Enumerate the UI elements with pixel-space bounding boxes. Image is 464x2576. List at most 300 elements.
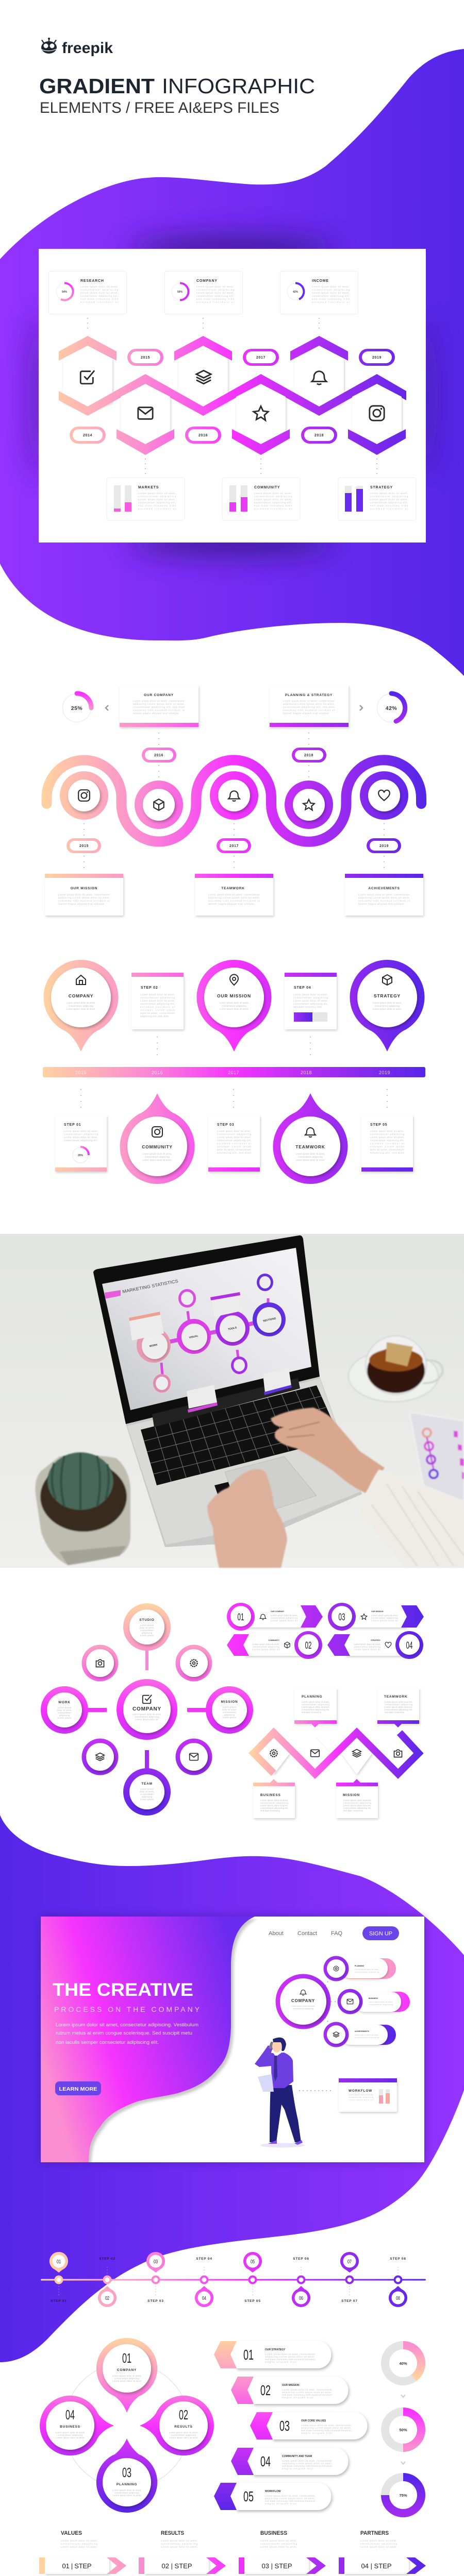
- step 02 results: [139, 2530, 226, 2574]
- info card: markets: Lorem ipsum dolor sit amet,: [138, 492, 176, 495]
- circle: mission: Lorem ipsum: [223, 1706, 236, 1708]
- info card: company: Lorem ipsum dolor sit amet,: [196, 292, 234, 294]
- info card: strategy: Lorem ipsum dolor sit amet,: [370, 492, 408, 495]
- node: 2017 bell: [210, 771, 258, 820]
- circle: company: COMPANY: [132, 1706, 161, 1712]
- pin 01 company: [96, 2338, 157, 2413]
- card: step 05: consectetuer adipiscing elit,: [370, 1139, 404, 1142]
- hexagon icons: [80, 370, 384, 420]
- timeline line: [41, 2279, 426, 2280]
- card: our company: [120, 685, 198, 727]
- card: achievements: adipiscing Lorem ipsum dolor sit amet,: [358, 896, 410, 899]
- hero body text: rutrum metus at enim congue scelerisque. Sed suscipit metu: [56, 2030, 192, 2036]
- screen labels: TOOLS: [228, 1326, 237, 1331]
- donut: 25%: 25%: [71, 705, 82, 711]
- card: step 05: Lorem ipsum dolor sit amet,: [370, 1130, 404, 1132]
- card: teamwork: Lorem ipsum dolor sit amet,: [385, 1701, 412, 1703]
- pin 04 business: Lorem ipsum dolor sit amet,: [56, 2431, 85, 2434]
- screen labels: WORK: [149, 1343, 158, 1348]
- zigzag ribbon: [59, 374, 406, 416]
- circle: team: TEAM: [141, 1782, 153, 1786]
- card: teamwork: adipiscing Lorem ipsum dolor sit amet,: [208, 896, 260, 899]
- info card: community: consectetuer adipiscing elit,: [254, 501, 292, 504]
- circle: work: Lorem ipsum: [58, 1706, 71, 1709]
- card: teamwork: [377, 1688, 419, 1727]
- card: achievements: laoreet magna aliquam erat volutpat.: [358, 903, 405, 905]
- step card 04: Lorem ipsum dolor sit: [354, 1648, 381, 1651]
- circle: work: dolor sit amet,: [57, 1709, 72, 1711]
- info card: income: consectetuer adipiscing: [312, 289, 350, 291]
- step pins upper: 01: [57, 2259, 61, 2265]
- item 02 our mission: 02: [260, 2382, 271, 2398]
- pin: strategy: consectetuer adipiscing: [375, 1005, 400, 1007]
- node: 2018 star: [285, 781, 333, 829]
- card: planning and strategy: adipiscing Lorem ipsum dolor sit amet,: [283, 703, 335, 705]
- logo wordmark: freepik: [62, 40, 113, 57]
- circle: studio: Lorem ipsum: [140, 1634, 154, 1637]
- info card: community: sed diam nonummy nibh: [254, 504, 292, 507]
- card: step 01: STEP 01: [64, 1123, 81, 1127]
- panel: purple wave background 2: [0, 1815, 464, 2362]
- info card: income: [280, 271, 358, 314]
- item 04 community and team: COMMUNITY AND TEAM: [282, 2455, 312, 2458]
- card: mission: [336, 1779, 378, 1818]
- step card 01: OUR COMPANY: [271, 1611, 285, 1613]
- timeline bar: 2017: [228, 1070, 239, 1075]
- pin 02 results: Lorem ipsum dolor sit amet: [169, 2436, 198, 2439]
- card: planning: [294, 1688, 337, 1727]
- step pins lower: 02: [105, 2296, 109, 2301]
- step 02 results: 02 | STEP: [162, 2562, 192, 2570]
- pin: community: Lorem ipsum dolor sit amet.: [143, 1159, 172, 1161]
- info card: company: 50%: [177, 291, 183, 294]
- step 02 results: consectetuer adipiscing: [161, 2543, 197, 2545]
- card: business: Lorem ipsum dolor sit amet,: [260, 1804, 288, 1807]
- step labels: STEP 03: [147, 2299, 164, 2303]
- item 03 our core values: adipiscing Lorem ipsum dolor sit amet,: [301, 2427, 351, 2429]
- pin 01 company: COMPANY: [117, 2368, 137, 2372]
- step card 04: consectetuer adipiscing: [354, 1646, 380, 1648]
- step card 04: Lorem ipsum dolor sit amet,: [354, 1643, 380, 1646]
- card: step 03: adipiscing elit, sed diam: [217, 1151, 251, 1154]
- step labels: STEP 06: [293, 2257, 309, 2261]
- card: step 02: consectetuer adipiscing: [140, 996, 175, 999]
- card: teamwork: sed diam nonummy: [385, 1711, 405, 1714]
- circle: mission: dolor sit amet,: [222, 1708, 237, 1711]
- card: step 03: dolor sit amet, consectetuer: [217, 1148, 251, 1151]
- card: planning: sed diam nonummy: [302, 1711, 322, 1714]
- timeline bar: 2016: [152, 1070, 163, 1075]
- step 01 values: Lorem ipsum dolor sit amet,: [61, 2539, 97, 2542]
- pin 01 company: Lorem ipsum dolor sit amet: [112, 2380, 141, 2382]
- pin: our mission: Lorem ipsum dolor sit amet,: [220, 1008, 248, 1010]
- pin: company: COMPANY: [69, 993, 93, 998]
- step card 02: COMMUNITY: [268, 1639, 280, 1641]
- card: step 03: [208, 1115, 260, 1172]
- circle: studio: consectetuer: [140, 1629, 154, 1632]
- step card 02: consectetuer adipiscing: [253, 1646, 279, 1648]
- card: teamwork: Lorem ipsum dolor sit amet,: [385, 1706, 412, 1708]
- circle: mission: adipiscing: [224, 1714, 235, 1716]
- step 04 partners: 04 | STEP: [361, 2562, 392, 2570]
- card: achievements: Lorem ipsum dolor sit amet, consectetuer: [358, 893, 410, 896]
- item 04 community and team: Lorem ipsum dolor sit amet, consectetuer: [282, 2460, 332, 2462]
- info card: strategy: consectetuer adipiscing elit,: [370, 501, 408, 504]
- step pins lower: [98, 2286, 407, 2307]
- hero body text: Lorem ipsum dolor sit amet, consectetur adipiscing. Vestibulum: [56, 2022, 198, 2028]
- info card: income: sed diam nonummy nibh: [312, 298, 350, 300]
- item 02 our mission: Lorem ipsum dolor sit amet, consectetuer: [282, 2388, 332, 2391]
- item 04 community and team: [231, 2448, 349, 2475]
- card: step 05: Lorem ipsum dolor sit amet,: [370, 1136, 404, 1139]
- step pins lower: 06: [299, 2296, 303, 2301]
- step 01 values: 01 | STEP: [62, 2562, 92, 2570]
- info card: research: consectetuer adipiscing elit,: [80, 295, 118, 297]
- pin: teamwork: Lorem ipsum dolor sit amet.: [296, 1159, 325, 1161]
- card: planning: Lorem ipsum dolor sit amet,: [302, 1706, 329, 1708]
- pin 04 business: consectetuer adipiscing: [58, 2434, 82, 2436]
- diamond zigzag diagram: [253, 1688, 419, 1818]
- info card: research: 54%: [62, 291, 68, 294]
- pill: planning: [324, 1956, 396, 1981]
- item 05 workflow: [214, 2483, 331, 2510]
- card: teamwork: Lorem ipsum dolor sit amet, consectetuer: [208, 893, 260, 896]
- pill: achievements: [324, 2022, 396, 2047]
- item 01 our strategy: magna aliquam erat: [265, 2361, 296, 2363]
- radial company diagram: [41, 1603, 253, 1816]
- item 01 our strategy: [214, 2341, 331, 2368]
- pin: company: consectetuer adipiscing: [69, 1005, 93, 1007]
- card: teamwork: TEAMWORK: [384, 1695, 407, 1699]
- card: business: consectetuer adipiscing elit,: [260, 1807, 288, 1809]
- donut 40%: [385, 2345, 421, 2381]
- hero subheading: PROCESS ON THE COMPANY: [54, 2005, 200, 2013]
- year pills: 2018: [314, 434, 324, 437]
- step 01 values: Lorem ipsum dolor sit amet.: [61, 2546, 97, 2548]
- white hexagons top row: [63, 346, 344, 412]
- pill: planning: Lorem ipsum dolor sit amet,: [355, 1969, 379, 1971]
- step 03 business: 03 | STEP: [262, 2562, 292, 2570]
- card: our mission: nonummy nibh euismod tincidunt ut: [58, 900, 110, 902]
- circle: gear: [175, 1645, 212, 1682]
- card: achievements: ACHIEVEMENTS: [368, 887, 400, 890]
- circle: studio: Lorem ipsum: [140, 1624, 154, 1626]
- item 02 our mission: [231, 2377, 349, 2404]
- step card 03: 03: [338, 1612, 345, 1623]
- screen: [102, 1248, 311, 1413]
- pin 04 business: [40, 2396, 114, 2455]
- icon: freepik mascot: [41, 38, 57, 54]
- node: 2015 instagram: [60, 771, 108, 820]
- item 03 our core values: sed diam nonummy nibh euismod tincidunt: [301, 2429, 352, 2432]
- illustration: businessman on the phone: [255, 2038, 305, 2147]
- card: step 04: [285, 973, 337, 1029]
- pin 03 planning: Lorem ipsum dolor sit amet: [112, 2494, 141, 2497]
- card: step 05: dolor sit amet, consectetuer: [370, 1148, 404, 1151]
- step 03 business: BUSINESS: [260, 2530, 287, 2536]
- info card: community: COMMUNITY: [254, 486, 280, 489]
- step 02 results: Lorem ipsum dolor sit amet,: [161, 2539, 197, 2542]
- step card 01: consectetuer adipiscing: [271, 1617, 297, 1619]
- card: step 02: adipiscing elit, sed diam: [140, 1015, 169, 1018]
- pill: business: Lorem ipsum dolor sit amet,: [369, 2001, 393, 2003]
- pin 01 company: 01: [122, 2350, 131, 2366]
- circle: company: [117, 1679, 177, 1740]
- year pills: [70, 349, 395, 444]
- info card: markets: consectetuer adipiscing: [138, 495, 176, 498]
- step card 02: Lorem ipsum dolor sit: [253, 1648, 280, 1651]
- circle: company: consectetuer adipiscing: [135, 1716, 159, 1718]
- pin timeline section: [43, 960, 425, 1184]
- button: sign up: [362, 1926, 399, 1940]
- numbered arrow cards: [227, 1603, 424, 1659]
- item 01 our strategy: 01: [243, 2347, 254, 2363]
- laptop hinge: [152, 1378, 300, 1427]
- card: step 03: volutpat. Lorem ipsum: [217, 1145, 251, 1148]
- donut: 42%: [377, 693, 405, 722]
- card: achievements: [345, 874, 423, 916]
- info card: income: INCOME: [312, 279, 329, 283]
- info card: markets: euismod tincidunt ut: [138, 507, 176, 510]
- card: planning: consectetuer adipiscing: [302, 1703, 329, 1706]
- cactus pot: [35, 1455, 130, 1565]
- step labels: STEP 07: [341, 2299, 358, 2303]
- pin 04 business: 04: [65, 2407, 75, 2422]
- card: workflow: Lorem ipsum dolor sit: [349, 2099, 373, 2101]
- card: mission: sed diam nonummy: [343, 1809, 363, 1812]
- item 05 workflow: Lorem ipsum dolor sit amet, consectetuer: [265, 2495, 315, 2497]
- card: workflow: [339, 2078, 397, 2112]
- card: teamwork: nonummy nibh euismod tincidunt ut: [208, 900, 260, 902]
- step 02 results: RESULTS: [161, 2530, 184, 2536]
- step labels: [51, 2257, 406, 2303]
- card: planning and strategy: consectetuer adipiscing elit, sed diam: [283, 706, 335, 708]
- info card: strategy: [338, 478, 416, 520]
- card: step 04: Lorem ipsum dolor sit amet,: [293, 999, 328, 1002]
- step labels: STEP 05: [244, 2299, 261, 2303]
- card: teamwork: TEAMWORK: [221, 887, 245, 890]
- step timeline: [41, 2252, 426, 2307]
- card: step 03: Lorem ipsum dolor sit amet,: [217, 1130, 251, 1132]
- panel shadow glow: [32, 236, 432, 556]
- tea cup: [349, 1336, 442, 1402]
- hero shape shadow: [89, 1918, 256, 2162]
- step card 02: [227, 1631, 322, 1659]
- photo: laptop on a desk: [0, 1234, 464, 1568]
- info card: income: euismod tincidunt ut: [312, 301, 350, 303]
- info card: company: consectetuer adipiscing elit,: [196, 295, 234, 297]
- info card: strategy: sed diam nonummy nibh: [370, 504, 408, 507]
- circle: layers: [81, 1738, 119, 1775]
- card: our mission: laoreet magna aliquam erat volutpat.: [58, 903, 105, 905]
- step card 01: 01: [237, 1612, 244, 1623]
- item 01 our strategy: Lorem ipsum dolor sit amet, consectetuer: [265, 2353, 315, 2355]
- info card: community: consectetuer adipiscing: [254, 495, 292, 498]
- card: planning: Lorem ipsum dolor sit amet,: [302, 1701, 329, 1703]
- step labels: STEP 01: [51, 2299, 67, 2303]
- card: our company: OUR COMPANY: [144, 693, 174, 697]
- card: step 02: Lorem ipsum dolor sit amet,: [140, 993, 175, 996]
- card: our company: laoreet magna aliquam erat volutpat.: [133, 712, 179, 715]
- item 05 workflow: sed diam nonummy nibh euismod tincidunt: [265, 2500, 316, 2502]
- four pin cycle diagram: [40, 2338, 214, 2513]
- donut charts: [385, 2345, 421, 2513]
- circle: work: adipiscing: [59, 1714, 70, 1717]
- circle: team: Lorem ipsum: [140, 1788, 154, 1790]
- year pills: 2015: [141, 356, 150, 360]
- heading line 1: GRADIENT: [39, 74, 155, 98]
- navigation: Contact: [297, 1930, 317, 1937]
- circle: team: Lorem ipsum: [140, 1798, 154, 1801]
- card: step 01: Lorem ipsum dolor sit amet,: [64, 1136, 98, 1139]
- card: step 04: STEP 04: [294, 986, 311, 990]
- pin 01 company: Lorem ipsum dolor sit amet,: [112, 2375, 141, 2377]
- info card: company: euismod tincidunt ut: [196, 301, 235, 303]
- button: learn more: [55, 2081, 101, 2095]
- pill: planning: PLANNING: [355, 1965, 364, 1967]
- card: planning and strategy: laoreet magna aliquam erat volutpat.: [283, 712, 329, 715]
- circle: team: dolor sit amet,: [140, 1790, 154, 1793]
- pill: planning: consectetuer adipiscing: [355, 1971, 379, 1973]
- info card: income: Lorem ipsum dolor sit amet,: [312, 292, 350, 294]
- step pins upper: 07: [347, 2259, 352, 2265]
- landing page mockup: [41, 1917, 424, 2165]
- hero body text: [56, 2022, 198, 2045]
- info card: markets: sed diam nonummy nibh: [138, 504, 176, 507]
- step 01 values: consectetuer adipiscing: [61, 2543, 97, 2545]
- pin: community: consectetuer adipiscing: [145, 1156, 170, 1158]
- card: teamwork: consectetuer adipiscing elit,: [385, 1708, 412, 1711]
- pin: community: COMMUNITY: [142, 1144, 173, 1149]
- info card: strategy: STRATEGY: [370, 486, 393, 489]
- year pills: 2019: [372, 356, 382, 360]
- pin 03 planning: PLANNING: [117, 2483, 137, 2486]
- pin 04 business: Lorem ipsum dolor sit amet: [56, 2436, 85, 2439]
- item 02 our mission: magna aliquam erat: [282, 2396, 313, 2399]
- card: business: [253, 1779, 295, 1818]
- circle: mission: [206, 1686, 253, 1734]
- card: step 04: consectetuer adipiscing elit,: [293, 1003, 328, 1005]
- step card 03: Lorem ipsum dolor sit: [371, 1619, 399, 1622]
- card: workflow: WORKFLOW: [349, 2089, 372, 2093]
- step card 04: [327, 1631, 423, 1659]
- card: business: sed diam nonummy: [260, 1809, 280, 1812]
- arrow: left chevron: [106, 705, 108, 710]
- screen title: [105, 1278, 179, 1299]
- heading line 1 light: INFOGRAPHIC: [162, 74, 315, 98]
- info card: strategy: euismod tincidunt ut: [370, 507, 408, 510]
- card: step 03: consectetuer adipiscing elit,: [217, 1139, 251, 1142]
- info card: strategy: consectetuer adipiscing: [370, 495, 408, 498]
- card: step 05: STEP 05: [370, 1123, 388, 1127]
- year pills: 2016: [154, 754, 163, 757]
- hero body text: non iaculis semper consectetur adipiscing elit.: [56, 2040, 159, 2045]
- pill: business: [337, 1989, 410, 2014]
- pin: community: [120, 1093, 194, 1184]
- panel: purple wave background 1: [0, 49, 464, 676]
- step card 04: STRATEGY: [371, 1639, 381, 1641]
- year pills: [67, 748, 401, 853]
- step card 02: 02: [305, 1640, 311, 1651]
- screen labels: SECTIONS: [263, 1317, 277, 1323]
- pin: teamwork: Lorem ipsum dolor sit amet,: [296, 1153, 325, 1155]
- diamond icons: [270, 1750, 402, 1757]
- info card: company: consectetuer adipiscing: [196, 289, 234, 291]
- card: planning: consectetuer adipiscing elit,: [302, 1708, 329, 1711]
- logo: freepik: [41, 38, 113, 57]
- pin: strategy: STRATEGY: [374, 993, 401, 998]
- item 04 community and team: sed diam nonummy nibh euismod tincidunt: [282, 2465, 333, 2467]
- year pills: 2016: [198, 434, 208, 437]
- navigation: FAQ: [331, 1930, 342, 1937]
- year pills: 2014: [83, 434, 92, 437]
- card: step 02: Lorem ipsum dolor sit amet,: [140, 999, 175, 1002]
- timeline bar: 2018: [301, 1070, 312, 1075]
- hexagon bottom bands: [117, 429, 406, 455]
- donut: 25%: [63, 693, 91, 722]
- step 01 values: VALUES: [61, 2530, 82, 2536]
- circle: mission: consectetuer: [223, 1711, 237, 1714]
- card: step 02: dolor sit amet, consectetuer: [140, 1012, 175, 1014]
- hero shape: [41, 1917, 255, 2162]
- step card 03: Lorem ipsum dolor sit amet,: [371, 1614, 398, 1617]
- card: workflow: Lorem ipsum dolor sit amet,: [349, 2094, 373, 2096]
- item 02 our mission: OUR MISSION: [282, 2384, 300, 2387]
- info card: markets: Lorem ipsum dolor sit amet,: [138, 498, 176, 501]
- info card: company: Lorem ipsum dolor sit amet,: [196, 285, 234, 288]
- step labels: STEP 02: [99, 2257, 115, 2261]
- step labels: STEP 08: [390, 2257, 406, 2261]
- keyboard: [141, 1385, 340, 1494]
- donut 50%: 50%: [399, 2428, 407, 2432]
- phone: [410, 1413, 464, 1502]
- hand: left: [207, 1469, 287, 1568]
- screen circles: [137, 1274, 286, 1393]
- step 03 business: Lorem ipsum dolor sit amet.: [260, 2546, 297, 2548]
- card: step 05: consectetuer adipiscing: [370, 1133, 404, 1136]
- pin: teamwork: [273, 1093, 347, 1184]
- card: step 02: [131, 973, 184, 1029]
- step card 03: [328, 1603, 424, 1631]
- arrow down: [401, 2395, 405, 2397]
- info card: company: [165, 271, 242, 314]
- snake timeline section: [45, 685, 423, 916]
- circle: work: [41, 1686, 88, 1734]
- panel: hexagon timeline card: [39, 249, 426, 543]
- info card: community: Lorem ipsum dolor sit amet,: [254, 498, 292, 501]
- card: teamwork: laoreet magna aliquam erat volutpat.: [208, 903, 255, 905]
- subtitle: ELEMENTS / FREE AI&EPS FILES: [40, 99, 279, 116]
- item 03 our core values: OUR CORE VALUES: [301, 2419, 326, 2422]
- item 02 our mission: sed diam nonummy nibh euismod tincidunt: [282, 2394, 333, 2396]
- pill: achievements: ACHIEVEMENTS: [355, 2030, 369, 2032]
- title: [39, 74, 315, 116]
- pin: strategy: [350, 960, 424, 1052]
- info card: income: 42%: [293, 291, 299, 294]
- step pins lower: 08: [396, 2296, 400, 2301]
- node: 2016 box: [135, 781, 183, 829]
- pin 01 company: consectetuer adipiscing: [114, 2377, 139, 2380]
- card: step 01: [55, 1115, 107, 1172]
- info card: research: sed diam nonummy nibh: [80, 298, 118, 300]
- pin: our mission: OUR MISSION: [217, 993, 251, 998]
- screen cards: [129, 1292, 292, 1413]
- card: planning and strategy: [270, 685, 349, 727]
- pin 02 results: consectetuer adipiscing: [171, 2434, 196, 2436]
- timeline bar: 2015: [75, 1070, 87, 1075]
- card: mission: MISSION: [343, 1793, 360, 1797]
- circle: company: consectetuer adipiscing: [293, 2008, 313, 2010]
